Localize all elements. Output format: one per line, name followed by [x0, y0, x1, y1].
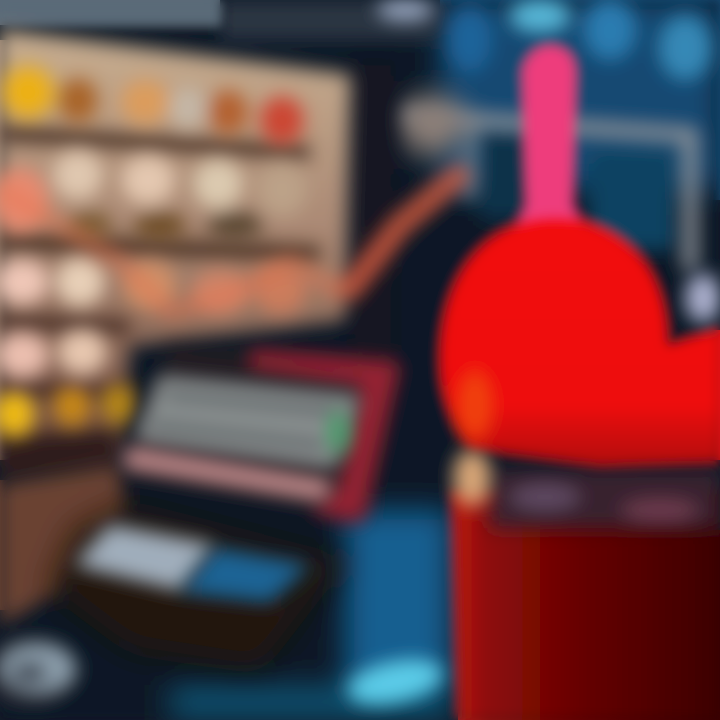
- laptop keyboard strip: [122, 448, 332, 500]
- laptop screen: [135, 376, 360, 468]
- cup body: [452, 490, 720, 720]
- shelf panel: [0, 30, 350, 460]
- background display frame: [400, 115, 690, 270]
- cup band highlights: [509, 483, 700, 522]
- shelf unit: [0, 30, 350, 478]
- bottom left object: [0, 636, 78, 708]
- red cup: [452, 450, 720, 720]
- cup dark band: [490, 470, 720, 528]
- pale highlight: [686, 274, 720, 322]
- laptop red frame: [250, 350, 400, 522]
- pink bottle neck: [512, 45, 590, 235]
- tablet: [50, 505, 345, 670]
- cup cream highlight: [454, 450, 490, 506]
- tablet blue screen: [180, 548, 310, 602]
- dark column: [352, 60, 396, 360]
- laptop green indicator: [326, 410, 350, 454]
- shelf dividers: [0, 125, 320, 478]
- floor highlight: [344, 652, 446, 712]
- pale patch behind trend line: [398, 95, 466, 155]
- laptop body: [120, 345, 395, 515]
- shelf products: [0, 66, 306, 436]
- heart orange glow: [457, 369, 493, 441]
- laptop: [120, 345, 400, 522]
- red heart: [440, 218, 720, 466]
- heart dome: [440, 218, 720, 466]
- tablet light screen: [75, 525, 215, 590]
- brown counter: [0, 465, 125, 625]
- orange trend line: [0, 170, 465, 312]
- blue background lights: [377, 0, 711, 250]
- blue floor: [170, 510, 450, 720]
- laptop screen lines: [150, 395, 340, 445]
- tablet base: [50, 505, 345, 670]
